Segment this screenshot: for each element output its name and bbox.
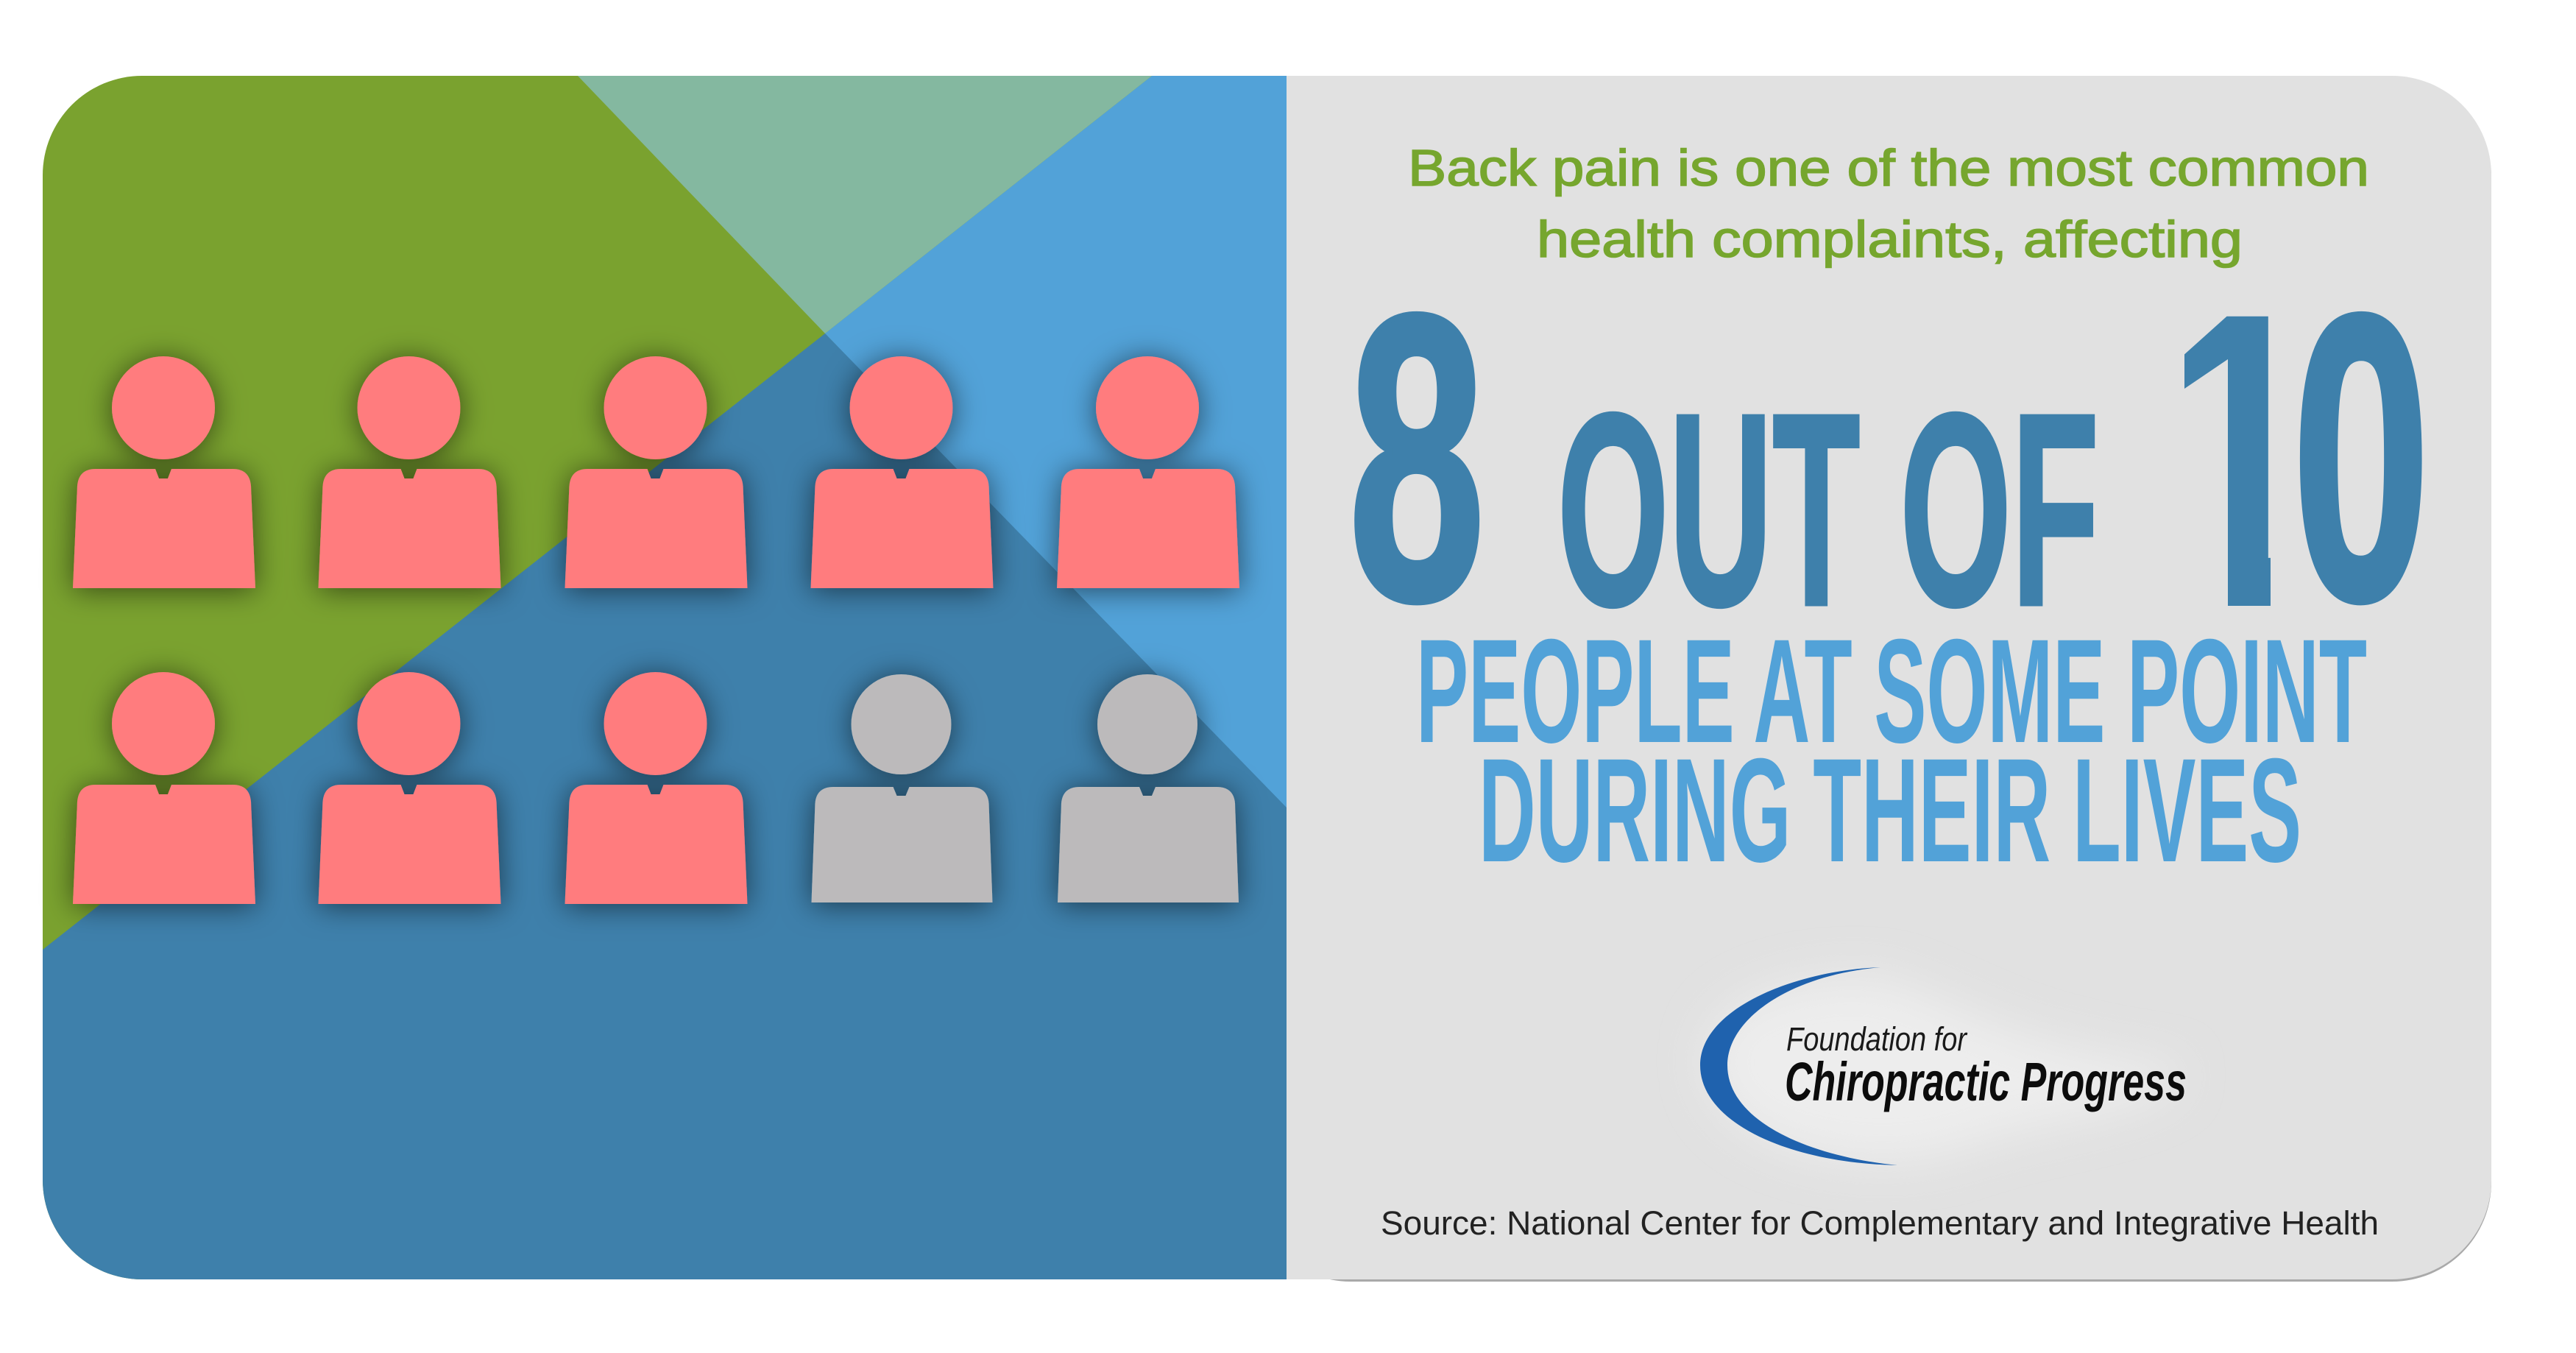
- source line: Source: National Center for Complementary and Integrative Health: [1381, 1204, 2379, 1242]
- intro text: Back pain is one of the most common: [1408, 139, 2369, 197]
- person 10 grey: [1058, 674, 1239, 902]
- headline: 8 out of 10: OUT OF: [1557, 356, 2099, 663]
- light blue area: [825, 76, 1287, 817]
- person 6: [73, 672, 255, 904]
- card shadow edge: [1251, 78, 2491, 1282]
- person 5: [1057, 356, 1239, 588]
- headline: 8 out of 10: 0: [2292, 230, 2430, 685]
- logo text: Foundation for: [1786, 1020, 1968, 1058]
- headline: 8 out of 10: 8: [1348, 230, 1485, 685]
- logo crescent: [1700, 967, 1897, 1165]
- person 3: [565, 356, 748, 588]
- person 4: [811, 356, 994, 588]
- subheading: people at some point during their lives: [1416, 608, 2367, 893]
- teal triangle: [578, 76, 1152, 333]
- person 2: [318, 356, 500, 588]
- logo: Foundation for Chiropractic Progress: Chiropractic Progress: [1785, 1051, 2187, 1112]
- person 9 grey: [811, 674, 992, 902]
- person 1: [73, 356, 255, 588]
- intro text: [1408, 139, 2369, 268]
- intro text: health complaints, affecting: [1537, 211, 2243, 268]
- logo: Foundation for Chiropractic Progress: [1700, 967, 2187, 1165]
- logo glow: [1708, 978, 2179, 1161]
- headline: 8 out of 10: [1354, 311, 2422, 610]
- person 8: [565, 672, 748, 904]
- panel: grey text background: [1287, 76, 2495, 1279]
- person 7: [318, 672, 500, 904]
- dark blue area: [43, 333, 1287, 1279]
- headline: 8 out of 10: 1: [2156, 230, 2321, 690]
- pictogram: 10 people, 8 highlighted: [73, 356, 1239, 904]
